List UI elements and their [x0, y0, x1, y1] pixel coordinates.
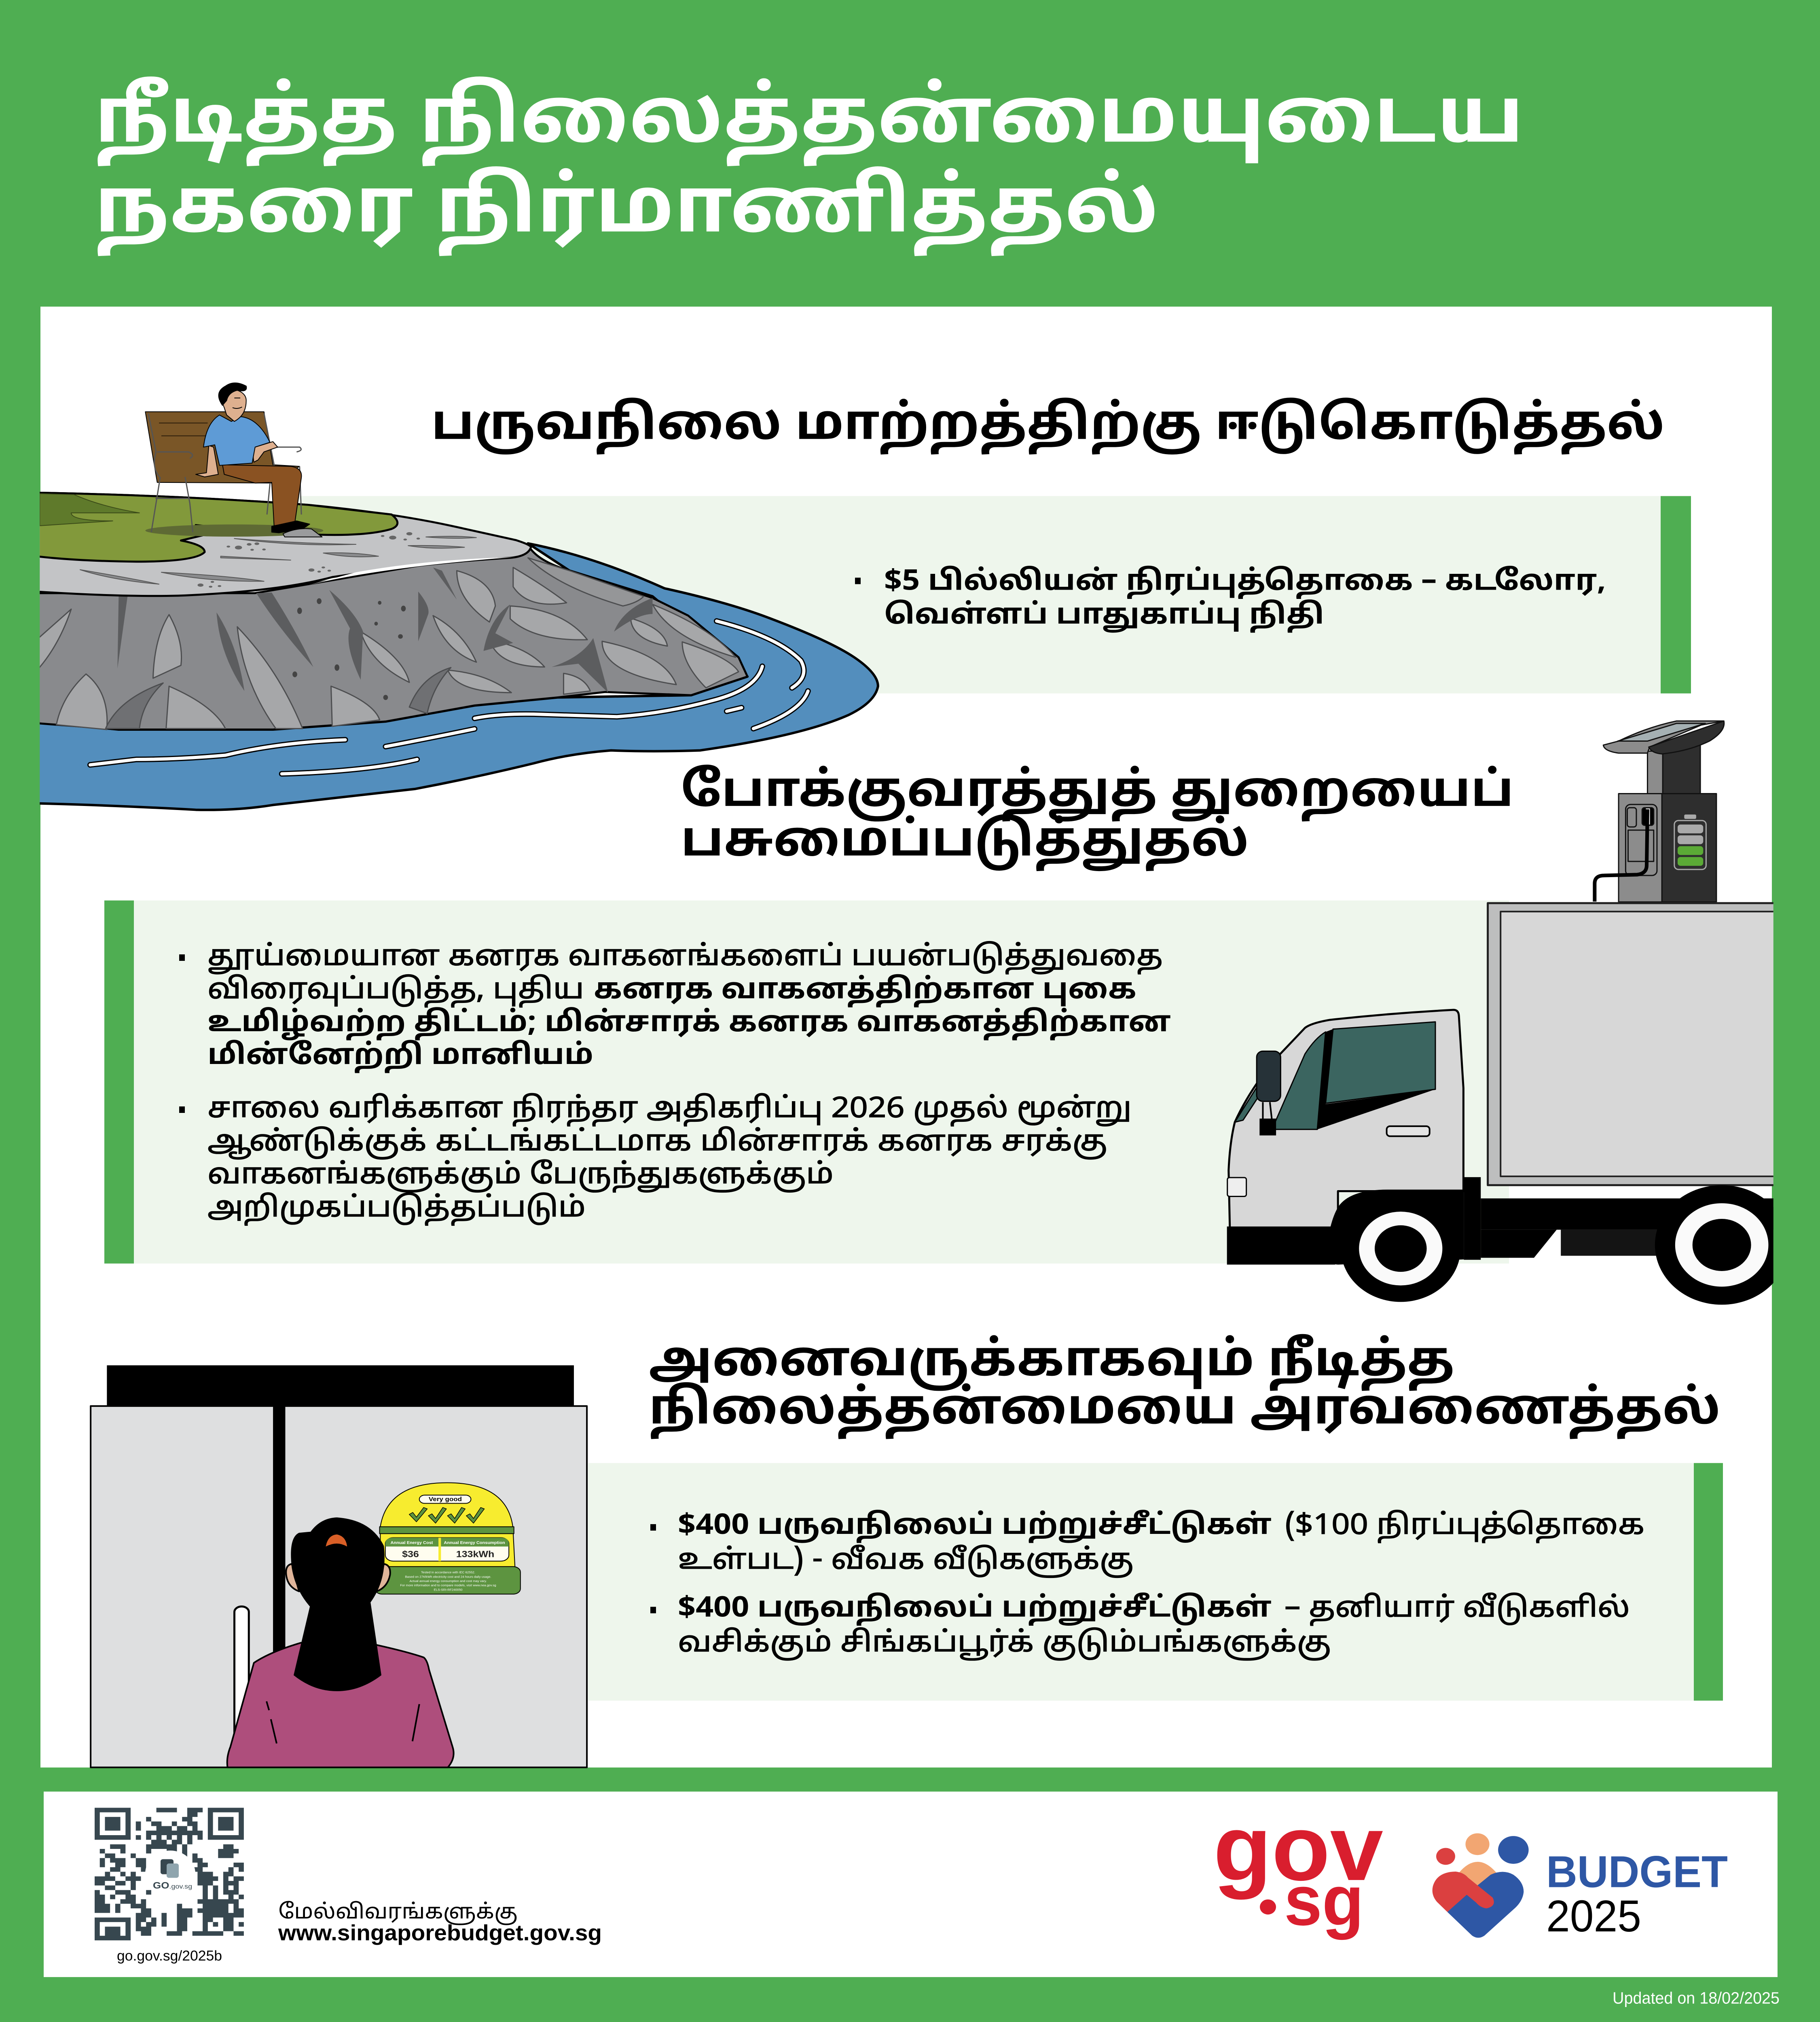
energy label text: $36	[402, 1550, 419, 1559]
shirt	[227, 1643, 454, 1767]
text block: coastal fund	[855, 565, 1606, 635]
more info text	[278, 1901, 602, 1945]
text block: green transport bullets: கனரக வாகனத்திற்கான புகை	[594, 973, 1136, 1009]
front wheel	[1341, 1195, 1460, 1302]
text block: green transport bullets: விரைவுப்படுத்த, புதிய	[207, 973, 584, 1009]
rear wheel	[1655, 1185, 1788, 1305]
bench	[145, 412, 301, 532]
cliff rock facets	[38, 558, 739, 730]
pebbles	[197, 532, 420, 700]
door handle	[1387, 1126, 1430, 1136]
text block: climate vouchers: $400 பருவநிலைப் பற்றுச்சீட்டுகள்	[678, 1509, 1272, 1544]
energy label text: 133kWh	[456, 1550, 494, 1559]
energy label text: For more information and to compare models, visit www.nea.gov.sg	[400, 1584, 496, 1587]
QR centre logo	[145, 1851, 195, 1897]
text block: climate vouchers: $400 பருவநிலைப் பற்றுச்சீட்டுகள்	[678, 1592, 1272, 1627]
text block: green transport bullets: உமிழ்வற்ற திட்டம்; மின்சாரக் கனரக வாகனத்திற்கான	[207, 1007, 1171, 1042]
text block: green transport bullets: சாலை வரிக்கான நிரந்தர அதிகரிப்பு 2026 முதல் மூன்று	[207, 1093, 1132, 1128]
illustration: woman viewing energy label on fridge	[91, 1365, 587, 1767]
heading: inclusive sustainability: அனைவருக்காகவும் நீடித்த	[649, 1334, 1454, 1394]
logo: budget heart	[1433, 1833, 1529, 1938]
illustration: man on bench on coastal cliff	[36, 383, 878, 810]
bumper and fender	[1227, 1190, 1464, 1265]
side mirror	[1263, 1102, 1272, 1120]
heading: green transport	[681, 764, 1514, 874]
text block: climate vouchers: ($100 நிரப்புத்தொகை	[1285, 1509, 1644, 1544]
panel: coastal protection tint	[291, 496, 1691, 694]
title: நகரை நிர்மாணித்தல்	[94, 165, 1159, 260]
panel: climate vouchers tint	[588, 1463, 1723, 1701]
text block: coastal fund: $5 பில்லியன் நிரப்புத்தொகை – கடலோர,	[884, 565, 1606, 601]
chassis	[1464, 1177, 1481, 1260]
logo: gov.sg: gov	[1213, 1796, 1383, 1900]
main white panel	[40, 307, 1772, 1768]
text block: green transport bullets: தூய்மையான கனரக வாகனங்களைப் பயன்படுத்துவதை	[207, 941, 1163, 976]
QR centre logo: GO.gov.sg	[153, 1880, 192, 1891]
logo: BUDGET 2025 wordmark: 2025	[1546, 1891, 1641, 1941]
fridge top	[107, 1365, 574, 1406]
heading: inclusive sustainability	[649, 1334, 1721, 1442]
energy label text: Actual annual energy consumption and cost may vary.	[410, 1579, 487, 1583]
logo: gov.sg: sg	[1284, 1861, 1364, 1940]
more info text: www.singaporebudget.gov.sg	[278, 1920, 602, 1945]
energy label	[375, 1483, 521, 1594]
text block: green transport bullets: அறிமுகப்படுத்தப்படும்	[207, 1192, 586, 1227]
cliff cracks	[117, 567, 652, 693]
logo: BUDGET 2025 wordmark: BUDGET	[1546, 1847, 1728, 1897]
cab	[1229, 1010, 1463, 1229]
text block: coastal fund: வெள்ளப் பாதுகாப்பு நிதி	[884, 599, 1324, 635]
hair	[291, 1517, 385, 1691]
text block: climate vouchers	[650, 1509, 1644, 1662]
title: நீடித்த நிலைத்தன்மையுடைய	[94, 75, 1524, 170]
energy label text: Tested in accordance with IEC 62552.	[421, 1571, 475, 1574]
text block: climate vouchers: – தனியார் வீடுகளில்	[1285, 1592, 1630, 1627]
fridge body	[91, 1406, 587, 1767]
panel: green transport tint	[104, 901, 1509, 1263]
water	[36, 544, 878, 810]
grass	[36, 493, 398, 562]
water highlights outline	[90, 621, 808, 774]
energy label text: Annual Energy Cost	[391, 1541, 433, 1545]
text block: climate vouchers: வசிக்கும் சிங்கப்பூர்க் குடும்பங்களுக்கு	[678, 1626, 1331, 1662]
illustration: electric truck and charger	[1227, 721, 1789, 1305]
logo: gov.sg	[1213, 1796, 1383, 1940]
heading: green transport: பசுமைப்படுத்துதல்	[681, 814, 1249, 874]
cliff top	[36, 493, 531, 596]
energy label text: Based on 27¢/kWh electricity cost and 24 hours daily usage.	[405, 1575, 491, 1578]
text block: green transport bullets: மின்னேற்றி மானியம்	[207, 1039, 593, 1074]
rock streaks	[80, 536, 476, 584]
bench shadow	[145, 525, 323, 537]
cargo box	[1488, 903, 1785, 1185]
heading: climate adaptation: பருவநிலை மாற்றத்திற்கு ஈடுகொடுத்தல்	[431, 397, 1665, 457]
energy label text: Very good	[429, 1496, 462, 1503]
text block: green transport bullets: ஆண்டுக்குக் கட்டங்கட்டமாக மின்சாரக் கனரக சரக்கு	[207, 1125, 1107, 1161]
windows	[1272, 1032, 1326, 1129]
text block: climate vouchers: உள்பட) - வீவக வீடுகளுக்கு	[678, 1544, 1134, 1579]
energy label text	[391, 1496, 505, 1591]
text block: green transport bullets: வாகனங்களுக்கும் பேருந்துகளுக்கும்	[207, 1159, 834, 1194]
cliff face	[36, 545, 747, 730]
heading: inclusive sustainability: நிலைத்தன்மையை அரவணைத்தல்	[649, 1382, 1721, 1442]
QR code	[95, 1810, 244, 1938]
fridge handle	[235, 1607, 249, 1744]
charging station	[1603, 721, 1724, 902]
QR caption: go.gov.sg/2025b	[117, 1948, 222, 1964]
ears	[286, 1564, 390, 1591]
energy label text: Annual Energy Consumption	[444, 1541, 505, 1545]
title	[94, 75, 1524, 260]
text block: green transport bullets	[179, 941, 1171, 1227]
logo: BUDGET 2025 wordmark	[1546, 1847, 1728, 1941]
water highlights	[90, 621, 808, 774]
man	[196, 383, 322, 537]
footer panel	[44, 1791, 1778, 1977]
headlight	[1227, 1178, 1246, 1196]
more info text: மேல்விவரங்களுக்கு	[278, 1901, 518, 1927]
battery gauge	[1674, 814, 1706, 869]
heading: green transport: போக்குவரத்துத் துறையைப்	[681, 764, 1514, 824]
energy label text: ELS-SRI-RF240050	[434, 1588, 462, 1591]
update note: Updated on 18/02/2025	[1613, 1989, 1780, 2007]
